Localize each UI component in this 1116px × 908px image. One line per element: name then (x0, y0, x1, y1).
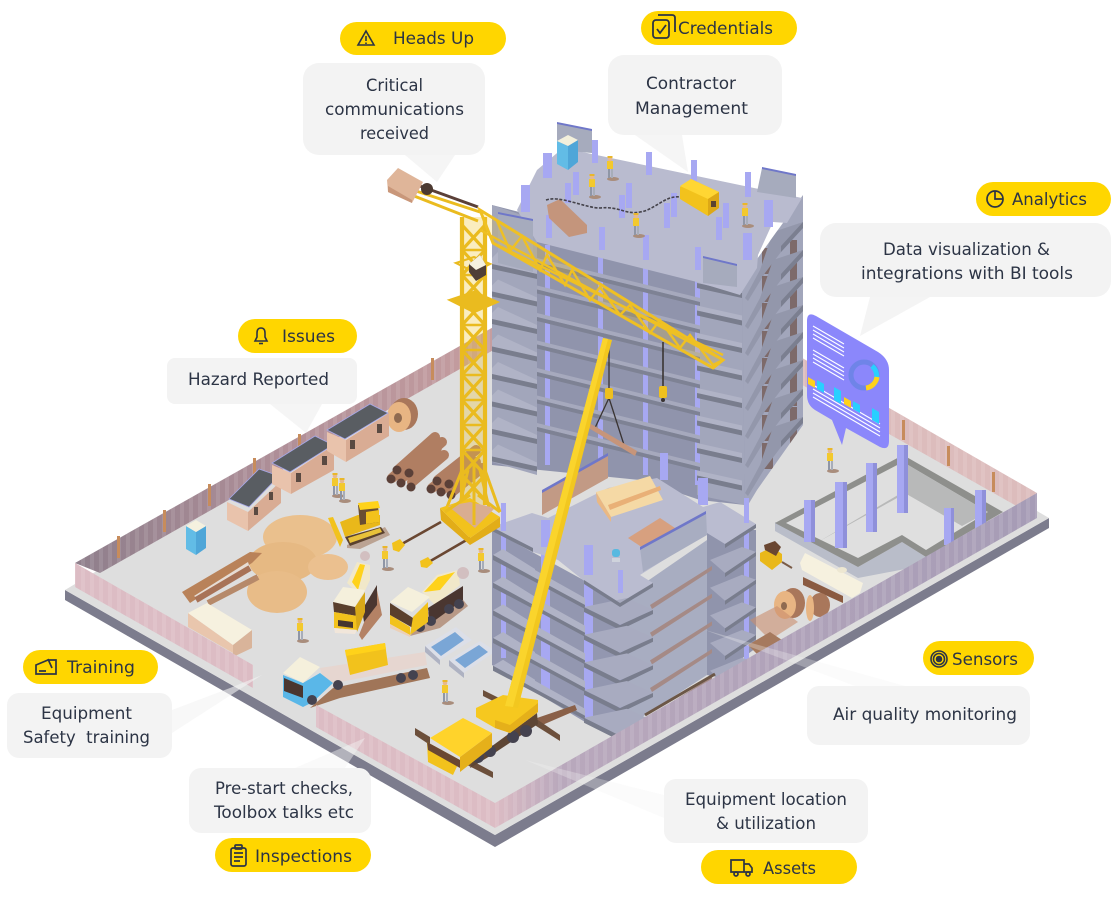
pill: analytics (976, 182, 1111, 216)
concrete formwork (425, 627, 496, 678)
foundation pit (775, 455, 1003, 578)
pill: training (23, 650, 158, 684)
sand piles (247, 515, 348, 613)
pill: inspections (215, 838, 371, 872)
site platform (65, 270, 1049, 847)
floor bands (492, 252, 742, 490)
tall building (492, 122, 803, 510)
callout: sensors: Air quality monitoring (833, 705, 1017, 725)
roof columns (521, 140, 773, 270)
fence: back-right (797, 355, 1037, 518)
pill: assets: Assets (763, 859, 816, 879)
bulldozer (328, 501, 390, 549)
callout: assets: Equipment location (685, 790, 847, 810)
pill: assets (701, 850, 857, 884)
front building columns (501, 453, 749, 735)
forklift (760, 541, 792, 570)
callout: credentials: Contractor (646, 74, 736, 94)
icon: warning triangle (358, 31, 374, 45)
callout: issues: Hazard Reported (188, 370, 329, 390)
callout: training: Safety training (23, 728, 150, 748)
crane hook (659, 342, 667, 402)
fence: front-right (495, 493, 1037, 828)
generator (680, 179, 719, 216)
crane jib (480, 210, 723, 368)
pallet on roof (628, 518, 675, 548)
roof toilet (557, 135, 578, 170)
fence: front-left (75, 563, 495, 828)
roof walls (498, 122, 796, 287)
tower crane (387, 168, 723, 545)
pill: heads up (340, 22, 506, 55)
cabin 3 (327, 404, 389, 462)
concrete mixer truck 2 (390, 567, 469, 637)
scaffold on ground (750, 606, 798, 640)
callout: analytics: Data visualization & (883, 240, 1050, 260)
boom (505, 338, 612, 708)
crane chassis (470, 713, 538, 768)
roof columns again (501, 498, 749, 593)
callout: assets: & utilization (716, 814, 816, 834)
icon: pie chart (987, 191, 1003, 207)
callout: heads up: received (360, 124, 429, 144)
roof concrete wall (640, 511, 707, 572)
pill: credentials: Credentials (678, 19, 773, 39)
icon: bell (255, 328, 267, 344)
worker near pit (827, 448, 839, 473)
suspended beam (587, 340, 637, 456)
building walls (492, 195, 803, 510)
callout: credentials (608, 55, 782, 172)
front building roof (492, 478, 756, 603)
foundation pillars (804, 445, 986, 548)
crane turret (476, 695, 538, 733)
callout: sensors (705, 630, 1030, 745)
callout: inspections: Toolbox talks etc (213, 803, 354, 823)
side slabs (745, 222, 803, 496)
cabin 1 (227, 469, 281, 531)
callout: issues (167, 358, 357, 433)
pill: credentials (641, 11, 797, 45)
roof workers (589, 156, 754, 238)
callout: training (7, 675, 262, 758)
icon: truck (731, 860, 752, 876)
workers on the ground (297, 473, 490, 705)
pill: training: Training (66, 658, 135, 678)
crane outriggers (415, 690, 577, 778)
icon: credentials badge (653, 15, 675, 38)
dirt patch (748, 632, 785, 657)
crane mast (445, 217, 500, 525)
icon: clipboard (231, 845, 246, 866)
callout: inspections (189, 738, 371, 833)
rear wall with timber (542, 453, 608, 515)
crane arm anchors (392, 522, 470, 568)
roof lumber (547, 199, 587, 237)
pill: sensors: Sensors (952, 650, 1018, 670)
trench with pipes (182, 552, 262, 603)
front building (492, 453, 756, 741)
pipes pile (386, 437, 482, 500)
hose (546, 197, 680, 213)
callout: inspections: Pre-start checks, (215, 779, 353, 799)
front building walls (492, 525, 756, 735)
crane base (440, 495, 500, 545)
roof slab (517, 148, 802, 295)
fence: back-left (75, 325, 497, 573)
callout: analytics: integrations with BI tools (861, 264, 1073, 284)
portable toilet (186, 520, 206, 555)
mobile crane (415, 338, 637, 778)
pill: heads up: Heads Up (393, 29, 474, 49)
blue barrel (612, 549, 620, 562)
callout: heads up (303, 63, 485, 182)
callout: credentials: Management (635, 99, 748, 119)
callout: heads up: Critical (366, 76, 423, 96)
crane wheels (472, 725, 532, 763)
site cabins (227, 404, 389, 531)
cable spool (387, 398, 418, 432)
fuel tank (800, 553, 863, 603)
pill: analytics: Analytics (1012, 190, 1087, 210)
crane cab (469, 255, 486, 281)
callout: training: Equipment (41, 704, 132, 724)
counter jib (387, 168, 480, 221)
flatbed truck (283, 643, 430, 708)
timber stack (596, 476, 663, 522)
pill: issues (238, 319, 357, 353)
analytics screen (807, 314, 889, 448)
icon: training board (36, 659, 56, 674)
front building slabs (492, 524, 756, 741)
pill: inspections: Inspections (255, 847, 352, 867)
cable spools (774, 588, 830, 621)
pill: issues: Issues (282, 327, 335, 347)
icon: sensor waves (931, 651, 947, 667)
concrete mixer truck 1 (333, 551, 382, 640)
callout: analytics (820, 223, 1111, 336)
cabin 2 (272, 436, 334, 494)
callout: assets (525, 760, 868, 843)
crane truck cab (427, 718, 492, 775)
callout: heads up: communications (325, 100, 464, 120)
pill: sensors (923, 641, 1034, 675)
storage container (188, 603, 252, 657)
